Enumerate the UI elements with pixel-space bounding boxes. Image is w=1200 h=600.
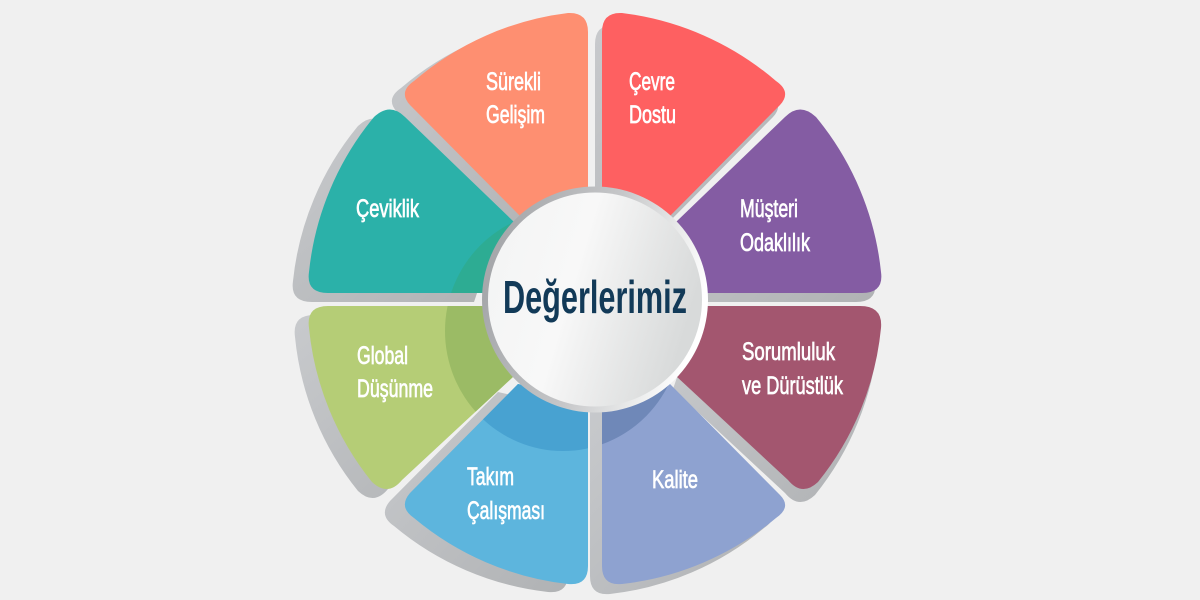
panel: Global Düşünme [308, 306, 513, 489]
panel: Müşteri Odaklılık [676, 110, 881, 293]
panel: Takım Çalışması [404, 384, 588, 584]
panel: Sorumluluk ve Dürüstlük: ve Dürüstlük [742, 372, 843, 400]
panel: Çevre Dostu [602, 13, 785, 216]
segment shadows [293, 20, 878, 594]
panel: Sürekli Gelişim [405, 13, 588, 216]
panel: Müşteri Odaklılık: Müşteri [740, 195, 798, 223]
panel: Global Düşünme: Düşünme [357, 375, 433, 403]
panel: Sorumluluk ve Dürüstlük: Sorumluluk [742, 338, 835, 366]
panel: Takım Çalışması: Çalışması [467, 497, 545, 525]
panel: Çeviklik: Çeviklik [356, 195, 419, 223]
panel: Kalite: Kalite [652, 466, 698, 494]
panel: Çeviklik [308, 110, 514, 293]
panel: Sorumluluk ve Dürüstlük [676, 306, 881, 489]
panel: Takım Çalışması: Takım [467, 463, 514, 491]
panel: Sürekli Gelişim: Gelişim [486, 101, 545, 129]
panel: Kalite [602, 384, 786, 584]
panel: Çevre Dostu: Çevre [629, 68, 675, 96]
center circle: Değerlerimiz [482, 186, 708, 412]
center circle: Değerlerimiz: Değerlerimiz [503, 271, 687, 323]
values wheel infographic [292, 13, 882, 594]
panel: Global Düşünme: Global [357, 342, 408, 370]
panel: Çevre Dostu: Dostu [629, 101, 676, 129]
panel: Müşteri Odaklılık: Odaklılık [740, 229, 810, 257]
panel: Sürekli Gelişim: Sürekli [486, 68, 541, 96]
